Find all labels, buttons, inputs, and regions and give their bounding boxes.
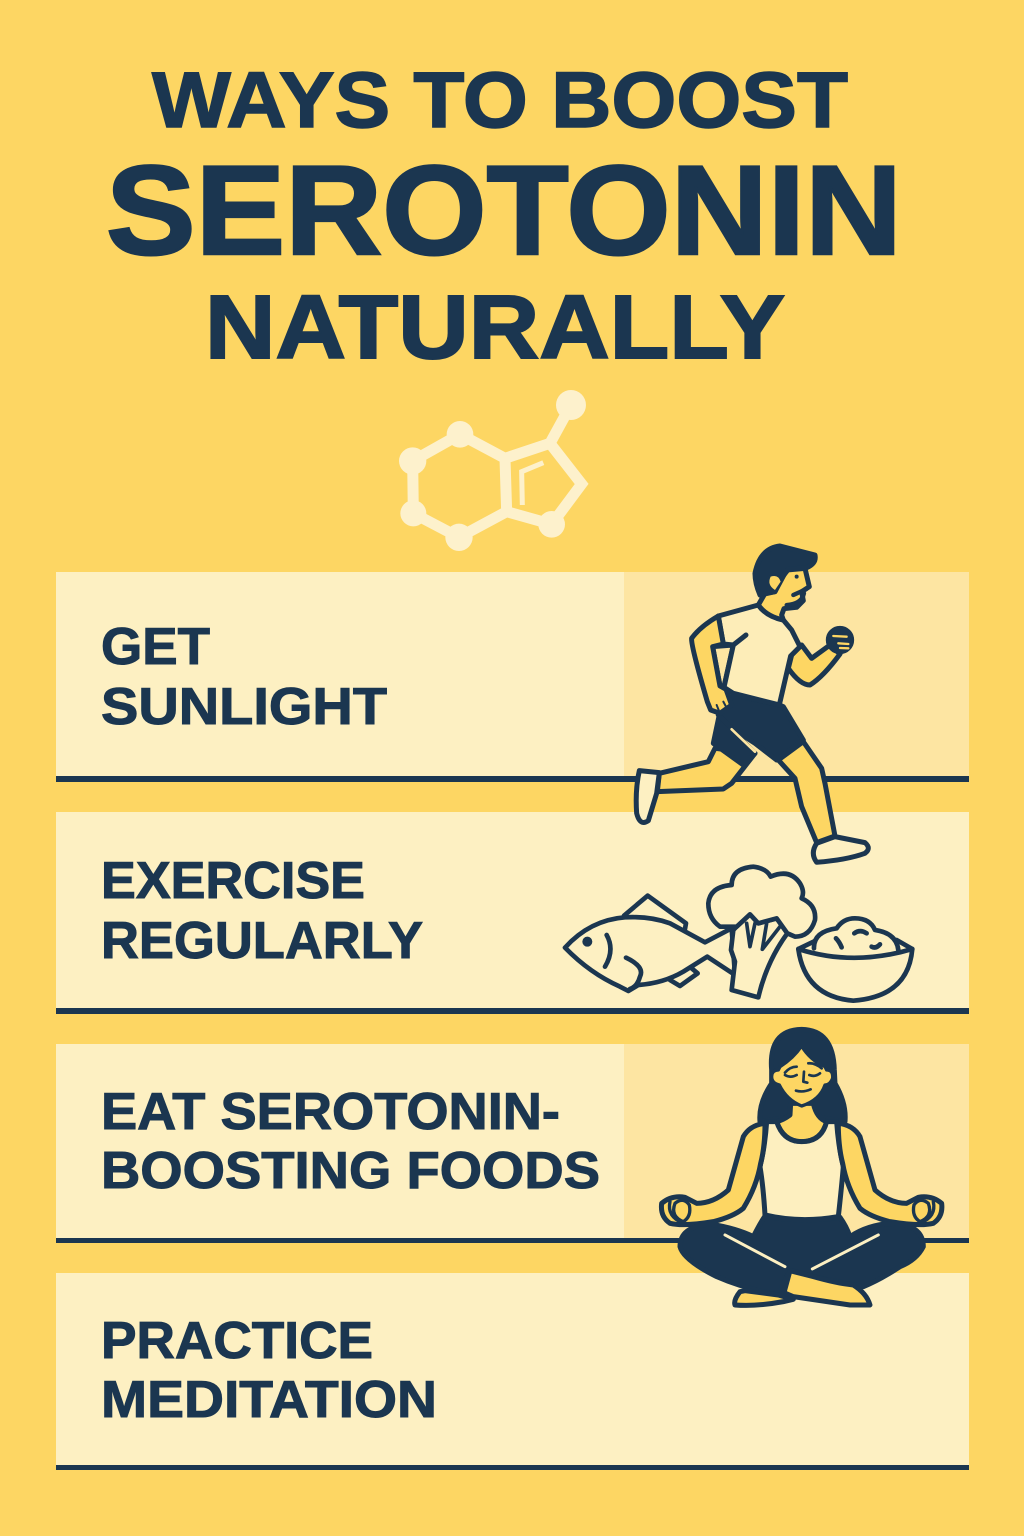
title: NATURALLY	[205, 278, 785, 378]
title	[106, 55, 902, 378]
panel: eat serotonin-boosting foods	[56, 1044, 969, 1243]
panel: practice meditation	[56, 1273, 969, 1470]
label: get sunlight	[101, 618, 387, 736]
label: get sunlight: SUNLIGHT	[101, 678, 387, 736]
label: practice meditation	[101, 1312, 437, 1429]
label: eat serotonin-boosting foods: BOOSTING FOODS	[101, 1142, 600, 1200]
icon: serotonin molecule	[399, 390, 586, 551]
label: exercise regularly: REGULARLY	[101, 912, 423, 970]
icon: meditating woman	[661, 1029, 942, 1305]
label: practice meditation: MEDITATION	[101, 1371, 437, 1429]
title: WAYS TO BOOST	[152, 55, 848, 144]
icon: runner	[636, 546, 868, 862]
label: eat serotonin-boosting foods	[101, 1083, 600, 1200]
panel: exercise regularly	[56, 812, 969, 1014]
label: exercise regularly	[101, 852, 423, 970]
label: get sunlight: GET	[101, 618, 210, 676]
icon: fish	[565, 896, 735, 991]
icon: broccoli	[708, 867, 815, 997]
label: eat serotonin-boosting foods: EAT SEROTONIN-	[101, 1083, 560, 1141]
title: SEROTONIN	[106, 139, 902, 281]
label: practice meditation: PRACTICE	[101, 1312, 373, 1370]
panel: get sunlight	[56, 572, 969, 782]
icon: rice bowl	[798, 918, 912, 1001]
label: exercise regularly: EXERCISE	[101, 852, 365, 910]
